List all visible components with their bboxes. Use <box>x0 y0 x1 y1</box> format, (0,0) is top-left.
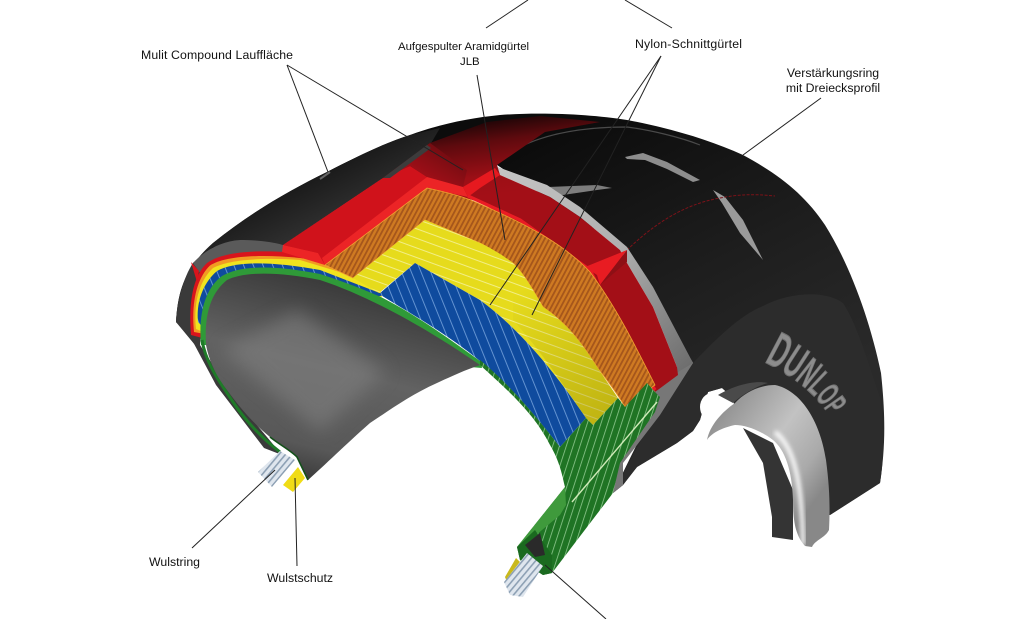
tire body <box>176 114 884 515</box>
cut layer: green arc <box>200 267 482 368</box>
layer: yellow belt <box>353 220 618 425</box>
layer: cap red <box>282 116 678 392</box>
reinforcement ring hidden line <box>627 195 775 250</box>
cut layer: yellow arc <box>195 259 385 335</box>
inner liner <box>206 274 480 480</box>
cut layer: orange arc <box>193 256 360 335</box>
bead right apex <box>504 530 552 597</box>
red tip <box>191 262 199 282</box>
tread dark strip <box>383 145 431 178</box>
cut layer: blue arc <box>198 263 385 335</box>
grey outer layer <box>495 166 693 493</box>
tread highlight <box>520 127 700 147</box>
rim <box>707 382 830 547</box>
label: reinforcement ring: Verstärkungsring <box>787 66 879 80</box>
layer: blue belt <box>379 263 586 447</box>
tread groove right <box>713 190 763 260</box>
layer: red corner left <box>282 177 468 265</box>
label: bead protection: Wulstschutz <box>267 571 333 585</box>
cut layer: red arc <box>190 251 340 340</box>
liner bead edge <box>270 437 308 480</box>
bead right wire <box>504 553 543 597</box>
layer: orange belt <box>325 188 655 407</box>
label: aramid belt: JLB <box>460 56 480 68</box>
tread left groove <box>320 172 330 179</box>
layer: red corner middle <box>463 168 500 197</box>
left grey cap <box>193 240 285 274</box>
layer: red corner right <box>585 250 627 285</box>
cut layer: green lower edge <box>202 340 280 452</box>
label: reinforcement ring: mit Dreiecksprofil <box>786 81 880 95</box>
carcass sheen line <box>572 402 657 502</box>
tread groove upper <box>625 153 700 182</box>
label: nylon belt: Nylon-Schnittgürtel <box>635 37 742 51</box>
tire left tread <box>176 128 440 345</box>
bead left chafer <box>283 467 305 492</box>
bead left wire <box>258 451 295 487</box>
tread groove middle <box>548 185 612 195</box>
layer: green carcass <box>480 360 660 575</box>
grey lower layer <box>600 363 693 493</box>
carcass turnup <box>517 487 566 547</box>
DUNLOP lettering path <box>764 362 832 420</box>
inner highlight <box>222 310 385 432</box>
label: tread: Mulit Compound Lauffläche <box>141 48 293 62</box>
outer left shell <box>176 263 282 455</box>
DUNLOP lettering: DUNLOP <box>765 332 846 410</box>
layer: mid red band <box>383 143 467 187</box>
leader lines <box>192 0 821 619</box>
bead seat white notch <box>700 393 724 421</box>
sidewall <box>613 294 883 515</box>
label: bead wire: Wulstring <box>149 555 200 569</box>
layer: red edge line <box>468 196 655 390</box>
layer: bright red band <box>283 166 427 265</box>
label: aramid belt: Aufgespulter Aramidgürtel <box>398 41 529 53</box>
